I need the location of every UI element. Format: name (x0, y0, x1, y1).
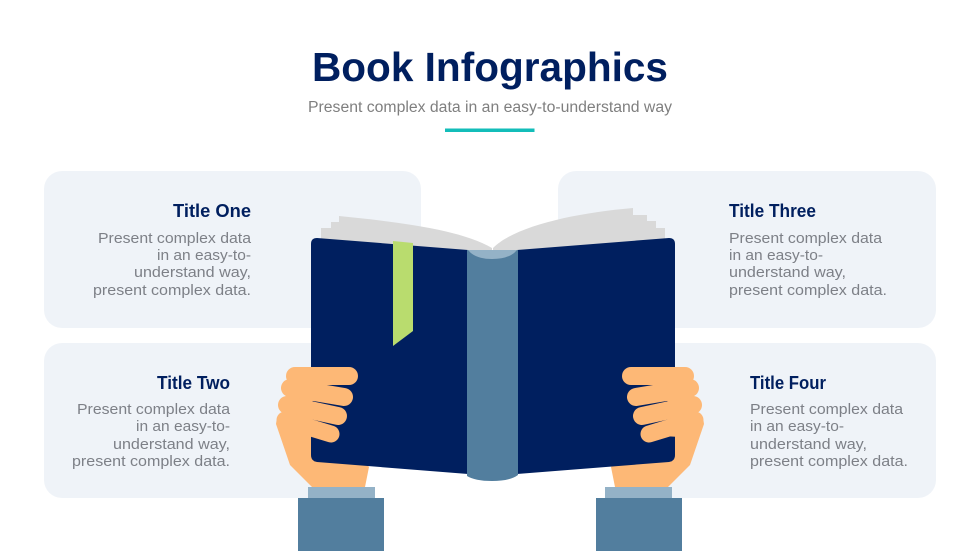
book pages: left (321, 216, 492, 252)
icon: left hand fingers (285, 370, 349, 438)
bookmark (393, 241, 413, 346)
text block: title three body: present complex data. (729, 282, 887, 299)
panel: title four (640, 343, 936, 498)
heading: title one: Title One (173, 201, 251, 221)
text block: title four body: present complex data. (750, 453, 908, 470)
open book illustration (311, 208, 675, 481)
text block: title two body (72, 401, 231, 470)
text block: title one body: in an easy-to- (157, 247, 251, 264)
text block: title four body: in an easy-to- (750, 418, 844, 435)
icon: right palm and sleeve (596, 400, 704, 551)
panel: title two (44, 343, 340, 498)
text block: title three body: in an easy-to- (729, 247, 823, 264)
panel: title one (44, 171, 421, 328)
title: Book Infographics (312, 44, 668, 90)
heading: title four: Title Four (750, 373, 826, 393)
heading: title three: Title Three (729, 201, 816, 221)
title underline accent (445, 128, 534, 132)
text block: title two body: in an easy-to- (136, 418, 230, 435)
text block: title two body: understand way, (113, 436, 230, 453)
text block: title one body: Present complex data (98, 230, 252, 247)
panel: title three (558, 171, 936, 328)
book spine (467, 250, 518, 481)
text block: title four body (750, 401, 908, 470)
book pages: right (493, 208, 665, 252)
text block: title three body: Present complex data (729, 230, 883, 247)
text block: title three body: understand way, (729, 264, 846, 281)
icon: right hand fingers (631, 370, 695, 437)
text block: title three body (729, 230, 887, 299)
heading: title two: Title Two (157, 373, 230, 393)
text block: title one body: present complex data. (93, 282, 251, 299)
book spine top highlight (468, 250, 517, 259)
book cover: left (311, 238, 468, 474)
book cover: right (517, 238, 675, 474)
text block: title one body (93, 230, 252, 299)
text block: title four body: Present complex data (750, 401, 904, 418)
icon: left palm and sleeve (276, 400, 384, 551)
text block: title one body: understand way, (134, 264, 251, 281)
text block: title two body: present complex data. (72, 453, 230, 470)
text block: title two body: Present complex data (77, 401, 231, 418)
subtitle: Present complex data in an easy-to-understand way (308, 99, 672, 116)
text block: title four body: understand way, (750, 436, 867, 453)
